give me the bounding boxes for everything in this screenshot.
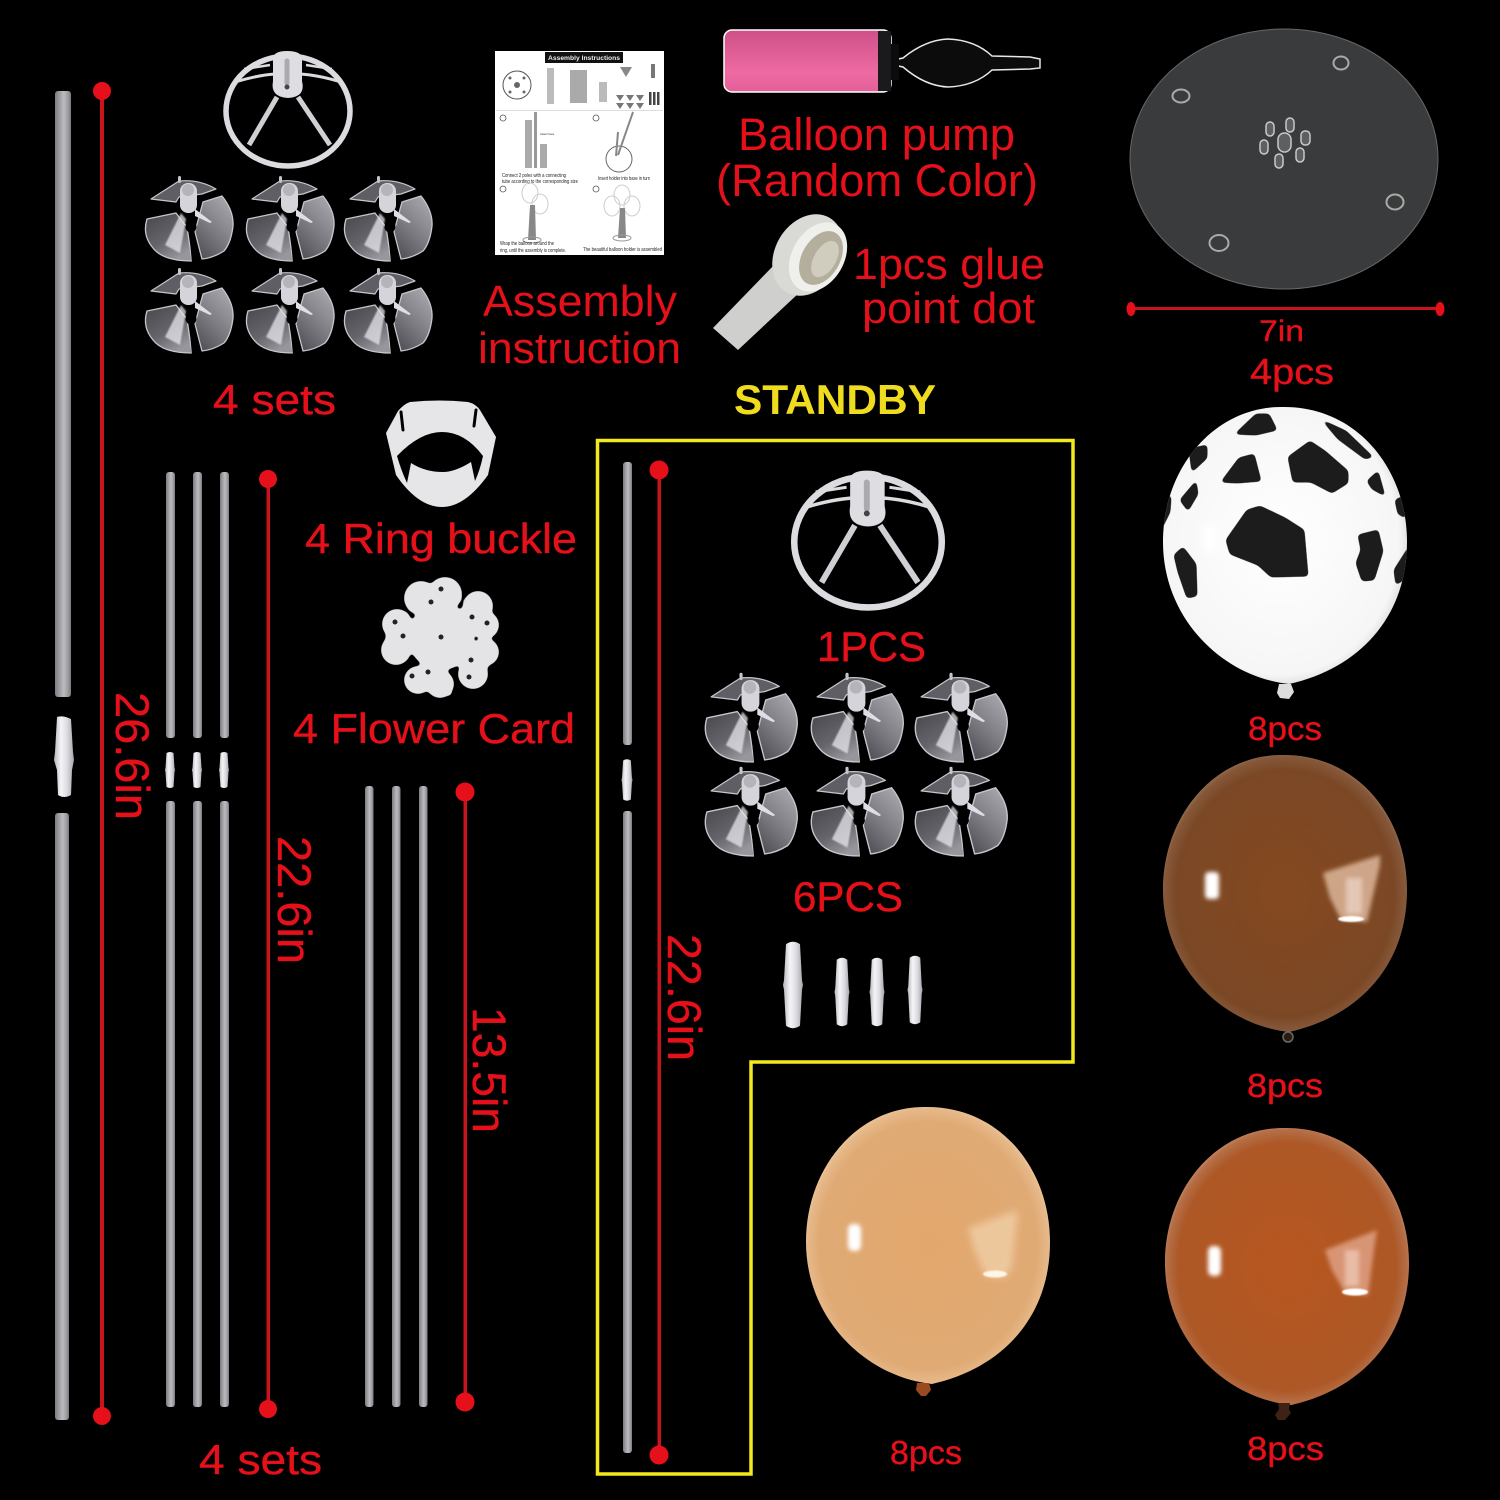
icon: balloon pump [724,30,1040,92]
label: 8pcs rust: 8pcs [1247,1430,1324,1467]
label: 1PCS: 1PCS [817,623,926,670]
three rods 13.5in [365,786,428,1407]
icon: acrylic base disc [1130,29,1438,289]
standby wheel holder [794,471,942,607]
dimension line standby 22.6in: 22.6in [658,934,711,1061]
icon: ring buckle [386,400,496,507]
label: 8pcs tan: 8pcs [890,1434,962,1471]
label: 8pcs brown: 8pcs [1247,1067,1323,1104]
label: 4 flower card: 4 Flower Card [293,705,575,752]
label: balloon pump: (Random Color) [716,155,1038,206]
dimension line 26.6in [93,82,159,1425]
icon: flower card [381,577,499,698]
panel: standby outline [598,440,1073,1474]
balloon: cow print [1160,407,1410,699]
icon: assembly instruction sheet: tube according to the corresponding size [502,179,578,185]
label: 8pcs cow: 8pcs [1248,710,1322,747]
four connectors [783,942,922,1028]
label: balloon pump: Balloon pump [738,109,1015,160]
standby six balloon cups [705,673,1007,858]
icon: assembly instruction sheet: The beautiful balloon holder is assembled [583,247,662,253]
dimension line standby 22.6in [650,460,711,1464]
label: assembly instruction: instruction [478,324,681,373]
dimension line 22.6in [259,470,321,1418]
label: 4 ring buckle: 4 Ring buckle [305,515,577,562]
label: assembly instruction [478,277,681,373]
label: 6PCS: 6PCS [793,873,903,920]
icon: glue dot roll [713,201,859,350]
label: glue point dot [853,240,1045,333]
icon: assembly instruction sheet: Wrap the balloon around the [500,241,554,247]
three rods 22.6in [165,472,229,1407]
icon: assembly instruction sheet: Connect 2 poles with a connecting [502,173,566,179]
balloon: rust [1165,1128,1409,1420]
dimension line 13.5in [456,782,516,1412]
label: assembly instruction: Assembly [483,277,677,326]
label: glue point dot: 1pcs glue [853,240,1045,289]
icon: assembly instruction sheet: Assembly Instructions [548,55,620,62]
main rod 26.6in [54,91,74,1420]
standby rod [622,462,632,1453]
dimension line 7in [1126,302,1444,348]
base wheel holder [226,51,350,166]
icon: assembly instruction sheet [495,51,664,255]
dimension line 7in: 7in [1259,315,1304,348]
label: balloon pump [716,109,1038,206]
six balloon cups [145,176,432,355]
label: glue point dot: point dot [862,284,1035,333]
label: 4pcs: 4pcs [1250,351,1334,392]
dimension line 26.6in: 26.6in [106,692,159,820]
label: 4 sets (rods): 4 sets [199,1436,322,1483]
dimension line 13.5in: 13.5in [463,1007,516,1133]
icon: assembly instruction sheet: Insert holder into base in turn [598,176,650,182]
balloon: tan [806,1107,1050,1396]
balloon: brown [1163,755,1407,1042]
dimension line 22.6in: 22.6in [268,836,321,964]
icon: assembly instruction sheet: Insert here [540,132,555,136]
label: 4 sets (cups): 4 sets [213,376,336,423]
heading: standby: STANDBY [734,376,936,423]
icon: assembly instruction sheet: ring, until the assembly is complete. [500,248,566,254]
